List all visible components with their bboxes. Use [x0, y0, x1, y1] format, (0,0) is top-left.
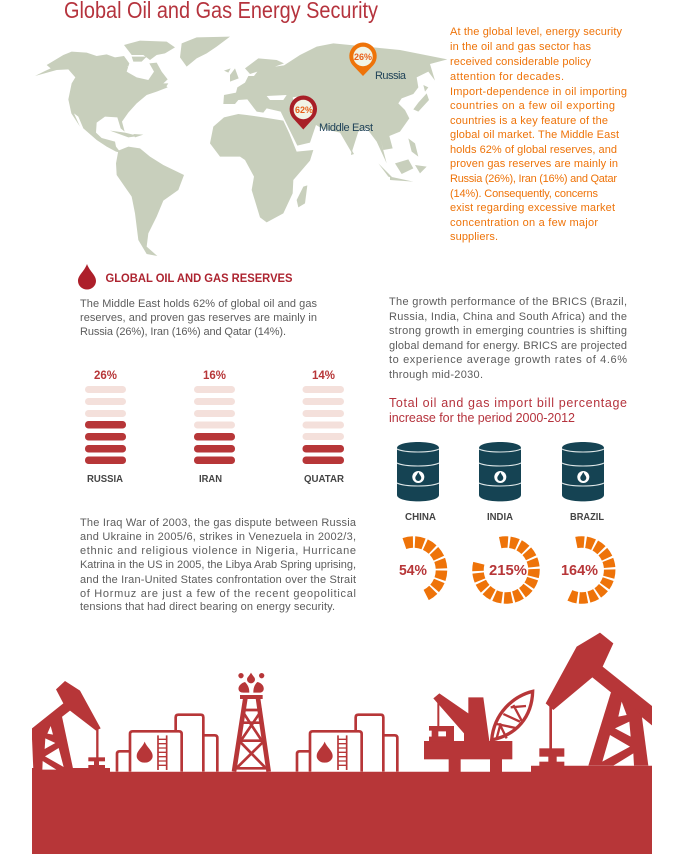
icon: barrel Brazil — [562, 442, 604, 501]
text block: intro: countries on a few oil exporting — [450, 100, 615, 112]
text block: reserves: reserves, and proven gas reserves are mainly in — [80, 312, 317, 324]
icon: barrel China — [397, 442, 439, 501]
text block: geopolitical tensions: of Hormuz are just a few of the recent geopolitical — [80, 588, 356, 600]
subheading: import bill — [389, 396, 627, 425]
icon: derrick with oil gusher — [234, 673, 269, 772]
donut: India 215%: 215% — [489, 562, 527, 579]
text block: BRICS: to experience average growth rates of 4.6% — [389, 354, 627, 366]
text block: geopolitical tensions: The Iraq War of 2003, the gas dispute between Russia — [80, 517, 357, 529]
label: China: CHINA — [405, 511, 436, 523]
donut: China 54% — [378, 534, 449, 606]
text block: geopolitical tensions — [80, 517, 357, 613]
column: Qatar: 14% — [312, 368, 335, 382]
text block: geopolitical tensions: Katrina in the US in 2005, the Libya Arab Spring uprising, — [80, 559, 356, 571]
text block: intro: At the global level, energy security — [450, 26, 622, 38]
text block: intro: (14%). Consequently, concerns — [450, 188, 598, 200]
column: Russia: 26% — [94, 368, 117, 382]
world map — [35, 37, 447, 256]
icon: barrel India — [479, 442, 521, 501]
text block: intro: countries is a key feature of the — [450, 115, 608, 127]
icon: oil drop — [78, 264, 96, 290]
text block: intro: holds 62% of global reserves, and — [450, 144, 617, 156]
pin: Russia: 26% — [354, 52, 372, 62]
label: Brazil: BRAZIL — [570, 511, 605, 523]
text block: geopolitical tensions: and Ukraine in 2005/6, strikes in Venezuela in 2002/3, — [80, 531, 356, 543]
column: Iran — [194, 368, 235, 485]
donut: Brazil 164%: 164% — [561, 562, 598, 579]
text block: BRICS: global demand for energy. BRICS are projected — [389, 340, 627, 352]
column: Iran: 16% — [203, 368, 226, 382]
pin: Middle East — [290, 96, 317, 130]
icon: offshore rig — [424, 691, 533, 772]
column: Qatar — [302, 368, 344, 485]
illustration: oil industry skyline — [32, 633, 652, 854]
ground — [32, 766, 652, 854]
donut: India 215% — [473, 537, 539, 603]
text block: BRICS: The growth performance of the BRICS (Brazil, — [389, 296, 627, 308]
column: Russia: RUSSIA — [87, 473, 123, 485]
text block: intro: in the oil and gas sector has — [450, 41, 592, 53]
icon: left pump jack — [32, 681, 110, 773]
heading: reserves: GLOBAL OIL AND GAS RESERVES — [106, 271, 292, 285]
text block: geopolitical tensions: tensions that had direct bearing on energy security. — [80, 601, 335, 613]
pin: Russia — [349, 42, 377, 76]
text block: intro: concentration on a few major — [450, 217, 598, 229]
text block: intro: received considerable policy — [450, 56, 592, 68]
text block: intro: suppliers. — [450, 231, 498, 243]
text block: intro: exist regarding excessive market — [450, 202, 615, 214]
icon: storage tanks left — [117, 715, 217, 772]
label: India: INDIA — [487, 511, 513, 523]
text block: BRICS — [389, 296, 627, 381]
text block: reserves: The Middle East holds 62% of global oil and gas — [80, 298, 318, 310]
icon: right pump jack — [539, 633, 652, 767]
text block: intro — [450, 26, 627, 243]
text block: intro: global oil market. The Middle East — [450, 129, 619, 141]
donut: Brazil 164% — [549, 537, 615, 603]
text block: reserves — [80, 298, 318, 338]
donut: China 54%: 54% — [399, 562, 427, 579]
text block: geopolitical tensions: ethnic and religious violence in Nigeria, Hurricane — [80, 545, 356, 557]
text block: geopolitical tensions: and the Iran-United States confrontation over the Strait — [80, 574, 356, 586]
label: Russia: Russia — [375, 70, 407, 82]
bar chart: reserves by country — [85, 368, 344, 485]
text block: intro: attention for decades. — [450, 71, 564, 83]
text block: intro: Russia (26%), Iran (16%) and Qatar — [450, 173, 617, 185]
text block: BRICS: through mid-2030. — [389, 369, 483, 381]
subheading: import bill: Total oil and gas import bill percentage — [389, 396, 627, 410]
pin: Middle East: 62% — [295, 105, 313, 115]
label: Middle East: Middle East — [319, 122, 373, 134]
column: Qatar: QUATAR — [304, 473, 344, 485]
icon: storage tanks right — [297, 715, 397, 772]
subheading: import bill: increase for the period 2000-2012 — [389, 411, 575, 425]
text block: BRICS: strong growth in emerging countries is shifting — [389, 325, 627, 337]
text block: intro: Import-dependence in oil importing — [450, 86, 627, 98]
text block: intro: proven gas reserves are mainly in — [450, 158, 618, 170]
text block: reserves: Russia (26%), Iran (16%) and Qatar (14%). — [80, 326, 286, 338]
text block: BRICS: Russia, India, China and South Africa) and the — [389, 311, 627, 323]
column: Iran: IRAN — [199, 473, 222, 485]
column: Russia — [85, 368, 126, 485]
